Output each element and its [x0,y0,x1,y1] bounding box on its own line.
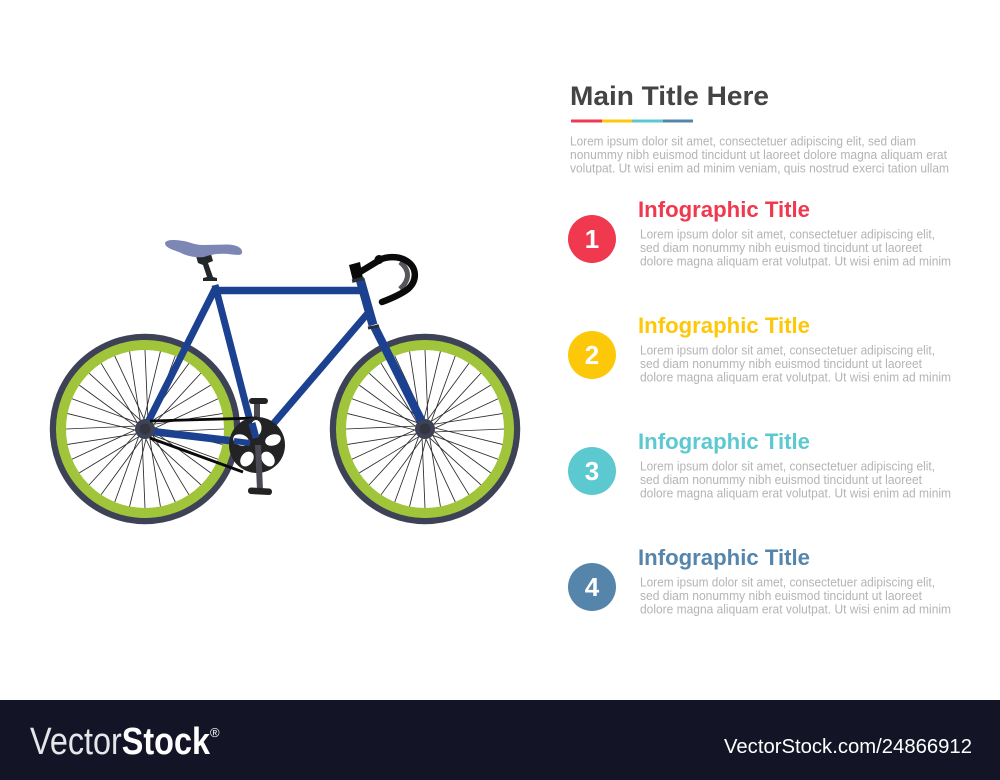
number 4: 4 [585,572,600,602]
rear hub [135,419,155,439]
number 2: 2 [585,340,599,370]
head tube clamp [368,326,379,328]
badge 1 [568,215,616,263]
badge 4 [568,563,616,611]
body 1 [640,228,951,268]
registered mark: ® [210,725,220,740]
item 4 [568,545,951,616]
body 2: sed diam nonummy nibh euismod tincidunt ut laoreet [640,357,923,371]
item 3 [568,429,951,500]
seat post [196,254,217,281]
body 3: sed diam nonummy nibh euismod tincidunt ut laoreet [640,473,923,487]
badge 2 [568,331,616,379]
item 1 [568,197,951,268]
body 4: Lorem ipsum dolor sit amet, consectetuer adipiscing elit, [640,576,935,590]
chain [150,418,257,472]
body 3: dolore magna aliquam erat volutpat. Ut wisi enim ad minim [640,486,951,500]
heading 4: Infographic Title [638,545,810,570]
body 1: dolore magna aliquam erat volutpat. Ut wisi enim ad minim [640,254,951,268]
footer bar [0,700,1000,780]
intro paragraph: volutpat. Ut wisi enim ad minim veniam, quis nostrud exerci tation ullam [570,162,949,176]
frame seen through chainring [234,423,256,443]
chainring cutouts [232,420,282,469]
chainring and crank [229,398,285,495]
top pedal [249,398,268,404]
body 2: Lorem ipsum dolor sit amet, consectetuer adipiscing elit, [640,344,935,358]
main title: Main Title Here [570,81,769,111]
body 2 [640,344,951,384]
crank arm [255,445,263,490]
intro paragraph: Lorem ipsum dolor sit amet, consectetuer adipiscing elit, sed diam [570,134,916,148]
pedal crank back [254,402,260,422]
heading 1: Infographic Title [638,197,810,222]
badge 3 [568,447,616,495]
front wheel [333,337,517,521]
bicycle illustration [53,240,517,521]
bike frame [146,279,423,443]
item 2 [568,313,951,384]
body 4: sed diam nonummy nibh euismod tincidunt ut laoreet [640,589,923,603]
intro paragraph [570,134,949,176]
heading 3: Infographic Title [638,429,810,454]
rear wheel [53,337,237,521]
title underline [571,120,693,122]
body 4 [640,576,951,616]
intro paragraph: nonummy nibh euismod tincidunt ut laoreet dolore magna aliquam erat [570,148,947,162]
footer logo: VectorStock [30,721,211,763]
body 2: dolore magna aliquam erat volutpat. Ut wisi enim ad minim [640,370,951,384]
heading 2: Infographic Title [638,313,810,338]
body 3: Lorem ipsum dolor sit amet, consectetuer adipiscing elit, [640,460,935,474]
footer id: VectorStock.com/24866912 [724,736,972,758]
number 1: 1 [585,224,599,254]
handlebar [349,255,415,302]
body 1: sed diam nonummy nibh euismod tincidunt ut laoreet [640,241,923,255]
front hub [415,419,435,439]
number 3: 3 [585,456,599,486]
body 3 [640,460,951,500]
body 4: dolore magna aliquam erat volutpat. Ut wisi enim ad minim [640,602,951,616]
saddle [165,240,242,257]
body 1: Lorem ipsum dolor sit amet, consectetuer adipiscing elit, [640,228,935,242]
bottom pedal [248,487,272,495]
